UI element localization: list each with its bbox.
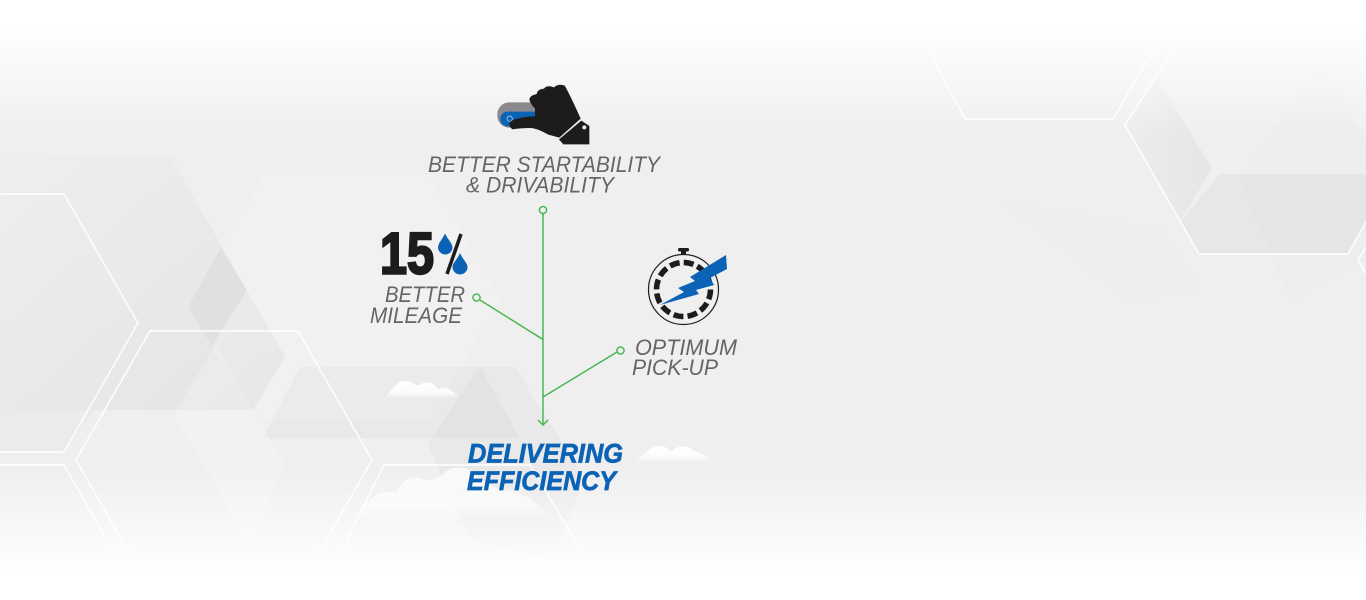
label: optimum pick-up: OPTIMUM	[635, 335, 737, 360]
cloud: right	[634, 446, 711, 462]
heading: delivering efficiency	[467, 438, 623, 496]
icon: hand pressing start button	[497, 85, 589, 144]
heading: delivering efficiency: EFFICIENCY	[467, 466, 619, 496]
connector lines	[473, 206, 624, 425]
icon: 15 percent with fuel drops: 15	[380, 222, 434, 286]
cloud: small left	[383, 381, 460, 398]
label: better startability and drivability: & DRIVABILITY	[466, 172, 616, 198]
label: better mileage	[370, 282, 465, 328]
label: better mileage: BETTER	[385, 282, 465, 307]
label: optimum pick-up: PICK-UP	[632, 355, 718, 380]
heading: delivering efficiency: DELIVERING	[468, 438, 623, 468]
label: optimum pick-up	[632, 335, 737, 380]
icon: stopwatch with lightning bolt	[648, 248, 727, 324]
label: better mileage: MILEAGE	[370, 303, 463, 328]
cloud: large bottom	[352, 467, 552, 520]
label: better startability and drivability	[428, 152, 662, 198]
label: better startability and drivability: BETTER STARTABILITY	[428, 152, 662, 177]
